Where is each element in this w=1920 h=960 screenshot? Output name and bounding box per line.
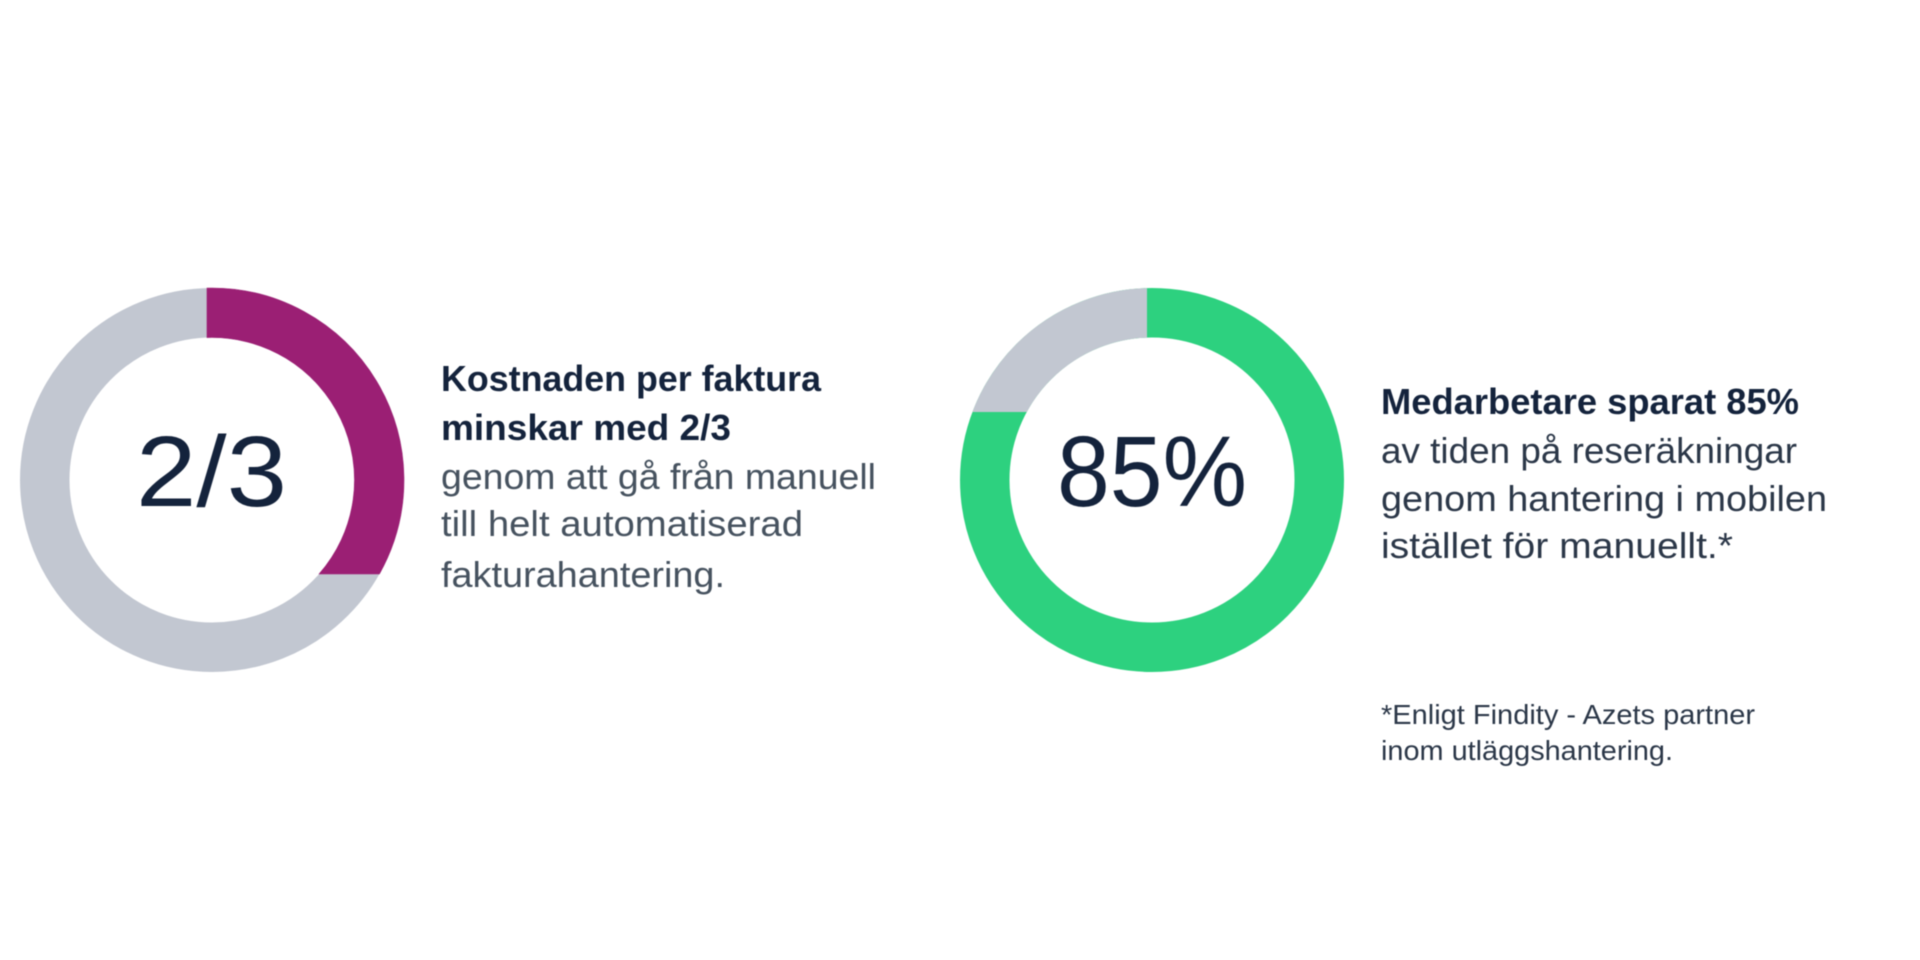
- description: fakturahantering.: [441, 554, 725, 595]
- description: genom hantering i mobilen: [1381, 478, 1827, 519]
- text block: expense time: [1381, 381, 1827, 566]
- description: till helt automatiserad: [441, 503, 803, 544]
- donut segment: purple: [207, 288, 404, 574]
- footnote: inom utläggshantering.: [1381, 735, 1673, 766]
- donut chart: 2/3: [45, 288, 404, 647]
- description: genom att gå från manuell: [441, 456, 876, 497]
- donut track: [45, 313, 379, 647]
- donut value: 2/3: [136, 416, 287, 528]
- description: istället för manuellt.*: [1381, 525, 1733, 566]
- panel: invoice cost: [45, 288, 876, 647]
- donut chart: 85%: [972, 288, 1319, 647]
- heading: Medarbetare sparat 85%: [1381, 381, 1799, 422]
- panel: expense time: [972, 288, 1827, 766]
- heading: minskar med 2/3: [441, 407, 731, 448]
- description: [441, 456, 876, 595]
- footnote: [1381, 699, 1755, 766]
- footnote: *Enligt Findity - Azets partner: [1381, 699, 1755, 730]
- heading: [441, 358, 822, 448]
- description: av tiden på reseräkningar: [1381, 430, 1797, 471]
- text block: invoice cost: [441, 358, 876, 595]
- description: [1381, 430, 1827, 566]
- donut value: 85%: [1057, 416, 1247, 528]
- heading: Kostnaden per faktura: [441, 358, 822, 399]
- donut remainder: grey: [972, 288, 1147, 412]
- donut segment: green: [985, 313, 1319, 647]
